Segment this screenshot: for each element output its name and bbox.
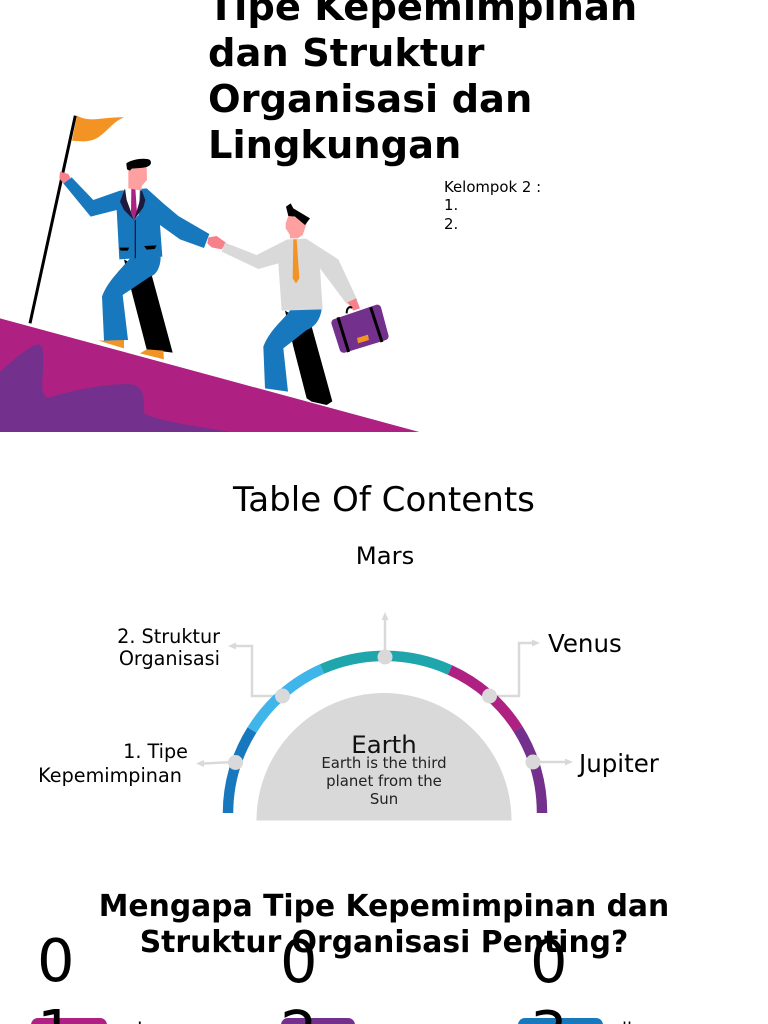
flag: [30, 116, 124, 323]
label: Struktur Organisasi: 2. Struktur: [117, 624, 220, 648]
label: Mars: Mars: [356, 540, 414, 570]
tab: magenta: [31, 1018, 107, 1024]
arc segments: [228, 656, 542, 813]
label: Tipe Kepemimpinan: [38, 740, 188, 787]
number 02: 0: [280, 927, 318, 996]
heading: table of contents: Table Of Contents: [233, 480, 535, 520]
group members text: Kelompok 2 :: [444, 178, 541, 196]
follower figure: [222, 203, 360, 405]
center semicircle: [256, 693, 512, 820]
section heading: Mengapa Tipe Kepemimpinan dan: [99, 888, 669, 924]
center description: planet from the: [326, 772, 442, 790]
connector arrows: [196, 612, 573, 767]
illustration: business leaders climbing a hill: [0, 115, 420, 432]
label: Struktur Organisasi: [117, 624, 220, 670]
center description: [321, 754, 447, 808]
label: Jupiter: Jupiter: [579, 749, 659, 778]
title: dan Struktur: [208, 31, 484, 76]
label: Venus: Venus: [548, 629, 622, 658]
connector dots: [228, 650, 540, 770]
section heading: [99, 888, 669, 960]
center label: Earth: Earth: [351, 730, 417, 759]
group members text: [444, 178, 541, 233]
title: [208, 0, 637, 168]
title: Organisasi dan: [208, 77, 532, 122]
group members text: 1.: [444, 196, 458, 214]
group members text: 2.: [444, 215, 458, 233]
tab: blue: [518, 1018, 603, 1024]
center description: Earth is the third: [321, 754, 447, 772]
hill: [0, 318, 419, 432]
number 01: 0: [37, 926, 75, 995]
label: Tipe Kepemimpinan: 1. Tipe: [123, 740, 188, 763]
center description: Sun: [370, 790, 398, 808]
section heading: Struktur Organisasi Penting?: [140, 924, 628, 960]
briefcase: [331, 305, 389, 353]
title: Lingkungan: [208, 123, 461, 168]
leader figure: [59, 159, 226, 359]
label: Struktur Organisasi: Organisasi: [119, 646, 220, 670]
tab: purple: [281, 1018, 355, 1024]
number 03: 0: [530, 927, 568, 996]
label: Tipe Kepemimpinan: Kepemimpinan: [38, 764, 182, 787]
